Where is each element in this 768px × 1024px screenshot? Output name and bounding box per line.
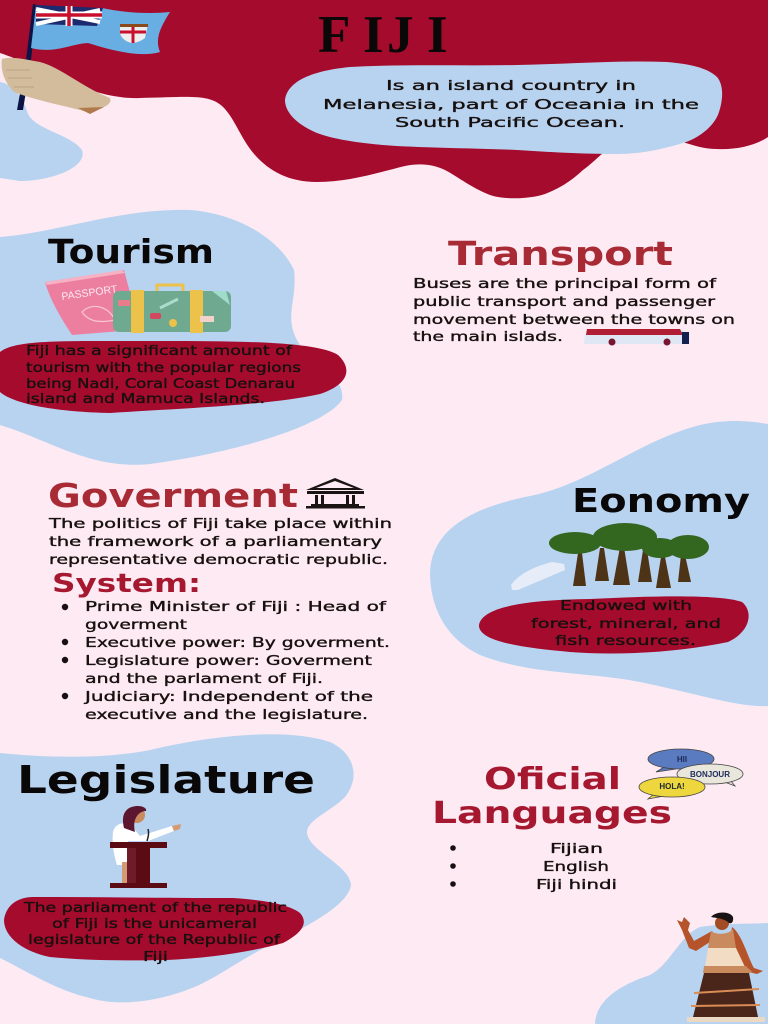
blob: economy background bbox=[430, 421, 768, 706]
heading: transport: Transport bbox=[448, 234, 673, 273]
list: system: Executive power: By goverment. bbox=[85, 635, 390, 651]
icon: trees bbox=[549, 523, 709, 588]
callout: tourism text: being Nadi, Coral Coast Denarau bbox=[26, 376, 295, 392]
icon: bus bbox=[584, 329, 689, 346]
list: system: Legislature power: Goverment bbox=[85, 653, 372, 669]
heading: official languages bbox=[432, 762, 672, 831]
blob: tourism background bbox=[0, 210, 342, 465]
heading: official languages: Oficial bbox=[484, 762, 621, 797]
text: politics bbox=[48, 516, 392, 568]
icon: suitcase bbox=[113, 285, 231, 333]
callout: intro: Is an island country in bbox=[386, 78, 636, 94]
callout: legislature text bbox=[4, 897, 304, 965]
callout: intro: Melanesia, part of Oceania in the bbox=[323, 97, 699, 113]
title: FIJI bbox=[318, 6, 448, 64]
list: system: Prime Minister of Fiji : Head of bbox=[85, 599, 388, 615]
panel: economy bbox=[430, 421, 768, 706]
list: system: goverment bbox=[85, 617, 187, 633]
text: transport bbox=[413, 276, 735, 345]
blob: legislature background bbox=[0, 734, 354, 1002]
callout: economy text: fish resources. bbox=[555, 633, 696, 649]
blob: bottom-right blue bbox=[595, 923, 768, 1024]
text: politics: the framework of a parliamentary bbox=[49, 534, 382, 550]
callout: intro: South Pacific Ocean. bbox=[395, 115, 625, 131]
icon: speech bubbles: HII bbox=[677, 755, 687, 764]
callout: economy text bbox=[479, 596, 749, 654]
callout: tourism text bbox=[0, 341, 346, 413]
icon: speech bubbles: BONJOUR bbox=[690, 770, 730, 779]
text: transport: the main islads. bbox=[413, 329, 563, 345]
icon: passport bbox=[45, 270, 135, 335]
callout: legislature text: legislature of the Republic of bbox=[28, 932, 282, 948]
callout: tourism text: tourism with the popular regions bbox=[26, 360, 301, 376]
text: transport: Buses are the principal form of bbox=[413, 276, 718, 292]
heading: tourism: Tourism bbox=[48, 232, 214, 271]
list: languages: Fijian bbox=[550, 841, 603, 857]
heading: legislature: Legislature bbox=[17, 758, 315, 802]
icon: speaker at podium bbox=[110, 806, 181, 888]
icon: hand holding Fiji flag bbox=[2, 4, 170, 114]
callout: economy text: Endowed with bbox=[560, 598, 692, 614]
heading: government: Goverment bbox=[48, 476, 298, 515]
callout: intro bbox=[285, 61, 722, 154]
list: system: and the parlament of Fiji. bbox=[85, 671, 323, 687]
list: system bbox=[62, 599, 390, 723]
icon: government building bbox=[306, 478, 365, 508]
text: transport: public transport and passenger bbox=[413, 294, 716, 310]
list: system: Judiciary: Independent of the bbox=[84, 689, 373, 705]
icon: speech bubbles: HOLA! bbox=[659, 782, 685, 791]
callout: legislature text: of Fiji is the unicameral bbox=[52, 916, 257, 932]
callout: economy text: forest, mineral, and bbox=[531, 616, 721, 632]
banner: red top shape bbox=[0, 0, 768, 198]
text: politics: representative democratic republic. bbox=[49, 552, 388, 568]
callout: tourism text: island and Mamuca Islands. bbox=[26, 391, 265, 407]
panel: transport bbox=[413, 234, 735, 346]
panel: legislature bbox=[0, 734, 354, 1002]
list: languages bbox=[450, 841, 617, 893]
text: transport: movement between the towns on bbox=[413, 312, 735, 328]
callout: tourism text: Fiji has a significant amount of bbox=[26, 343, 294, 359]
list: system: executive and the legislature. bbox=[85, 707, 368, 723]
icon: passport: PASSPORT bbox=[61, 283, 119, 303]
icon: crystal bbox=[511, 562, 565, 590]
icon: woman in traditional dress bbox=[677, 912, 765, 1022]
callout: legislature text: Fiji bbox=[143, 949, 168, 965]
heading: official languages: Languages bbox=[432, 796, 672, 831]
icon: speech bubbles bbox=[639, 749, 743, 799]
heading: system: System: bbox=[52, 569, 201, 599]
panel: official languages bbox=[432, 749, 743, 893]
panel: government bbox=[48, 476, 392, 723]
callout: legislature text: The parliament of the republic bbox=[23, 900, 287, 916]
text: politics: The politics of Fiji take place within bbox=[48, 516, 392, 532]
blob: top-left blue bbox=[0, 82, 83, 181]
list: languages: Fiji hindi bbox=[536, 877, 617, 893]
heading: economy: Eonomy bbox=[572, 481, 750, 520]
list: languages: English bbox=[543, 859, 609, 875]
panel: tourism bbox=[0, 210, 346, 465]
